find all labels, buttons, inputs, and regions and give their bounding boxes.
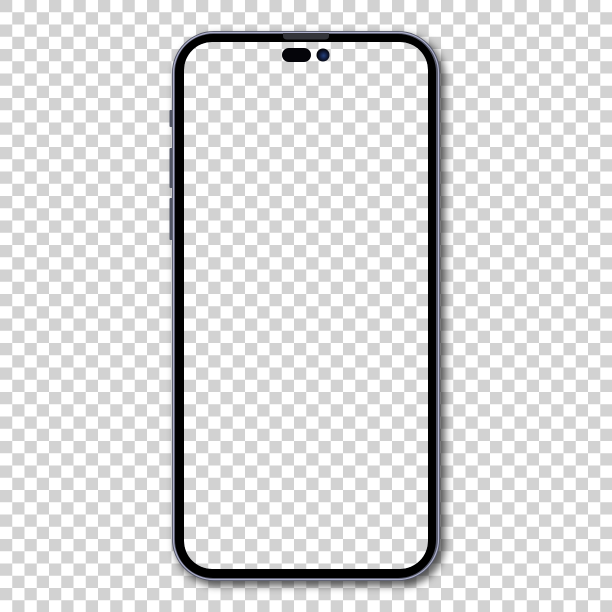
phone drop shadow	[175, 35, 445, 586]
black bezel	[175, 34, 436, 578]
side buttons	[170, 110, 174, 240]
front camera	[316, 48, 330, 62]
phone mockup	[170, 31, 440, 581]
top speaker	[283, 33, 329, 40]
frame highlight	[174, 32, 438, 580]
dynamic island pill	[282, 48, 311, 62]
metal frame	[172, 31, 440, 581]
